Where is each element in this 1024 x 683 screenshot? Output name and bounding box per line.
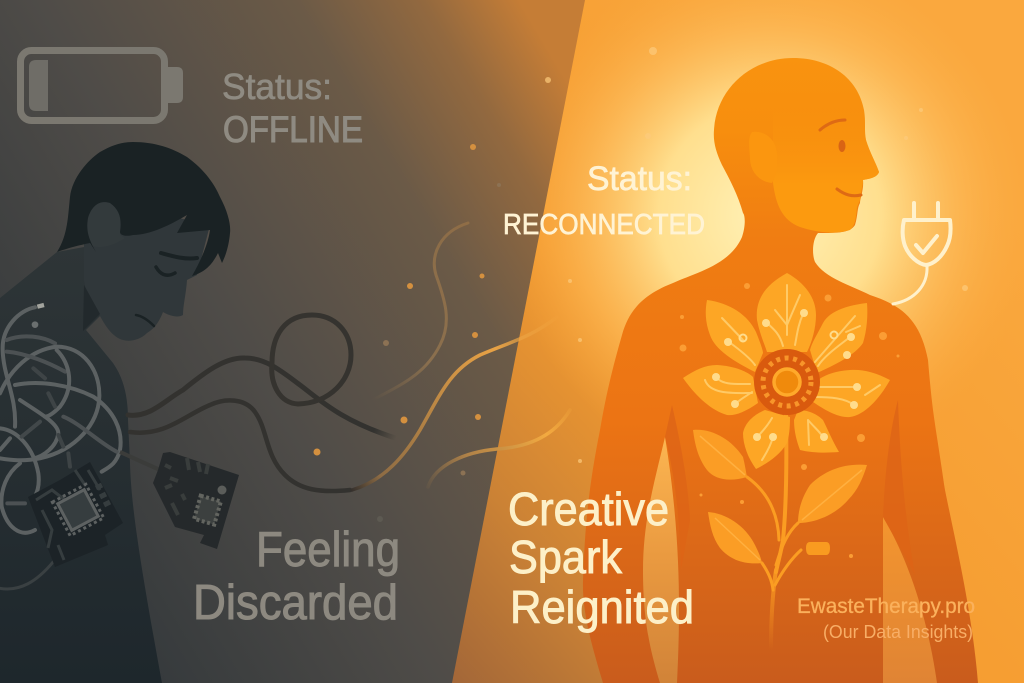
- brand credit: [797, 595, 975, 642]
- icon: low battery: [20, 50, 183, 120]
- caption: creative spark reignited: [508, 483, 694, 633]
- heading: status reconnected: RECONNECTED: [503, 209, 705, 241]
- petal circuit nodes: [712, 309, 861, 441]
- icon: plug with check mark: [893, 203, 951, 304]
- left armpit shadow: [665, 405, 690, 570]
- man ear: [87, 201, 125, 247]
- eye, brow and smile: [820, 120, 861, 196]
- cables trailing away: [128, 223, 570, 491]
- heading: status reconnected: Status:: [587, 160, 692, 198]
- tangled cables: [0, 305, 121, 589]
- flower stem and branches: [747, 415, 801, 650]
- detached circuit board: [120, 452, 239, 549]
- man body: [0, 245, 162, 683]
- man face and neck: [84, 205, 210, 341]
- caption: creative spark reignited: Reignited: [510, 581, 694, 633]
- chip pill: [806, 542, 830, 555]
- man eye and brow: [136, 253, 197, 326]
- figure: reconnected person: [583, 58, 978, 683]
- person face: [773, 110, 879, 233]
- left panel background: [0, 0, 585, 683]
- caption: creative spark reignited: Spark: [509, 531, 623, 583]
- petals: [683, 273, 890, 469]
- petal circuit traces: [705, 285, 880, 460]
- brand credit: (Our Data Insights): [823, 622, 973, 642]
- person ear: [749, 132, 777, 183]
- person silhouette: [583, 58, 978, 683]
- brand credit: EwasteTherapy.pro: [797, 595, 975, 618]
- man hair: [57, 142, 230, 276]
- floating spark particles: [314, 47, 968, 522]
- left arm gap: [643, 437, 679, 683]
- text: status offline: Status:: [222, 66, 332, 107]
- caption: feeling discarded: Discarded: [193, 576, 398, 630]
- caption: creative spark reignited: Creative: [508, 483, 669, 535]
- stem leaves: [693, 430, 867, 563]
- circuit board in chest: [28, 462, 123, 567]
- body sparkles: [680, 283, 900, 558]
- neck shadow: [83, 285, 100, 331]
- flower center: [754, 349, 820, 415]
- text: status offline: OFFLINE: [223, 109, 363, 150]
- text: status offline: [222, 66, 363, 150]
- right armpit shadow: [883, 400, 915, 575]
- figure: discarded man: [0, 142, 239, 683]
- flower with circuit veins: [683, 273, 890, 650]
- heading: status reconnected: [503, 160, 705, 241]
- right arm gap: [883, 517, 937, 683]
- caption: feeling discarded: [193, 523, 400, 630]
- caption: feeling discarded: Feeling: [256, 523, 400, 577]
